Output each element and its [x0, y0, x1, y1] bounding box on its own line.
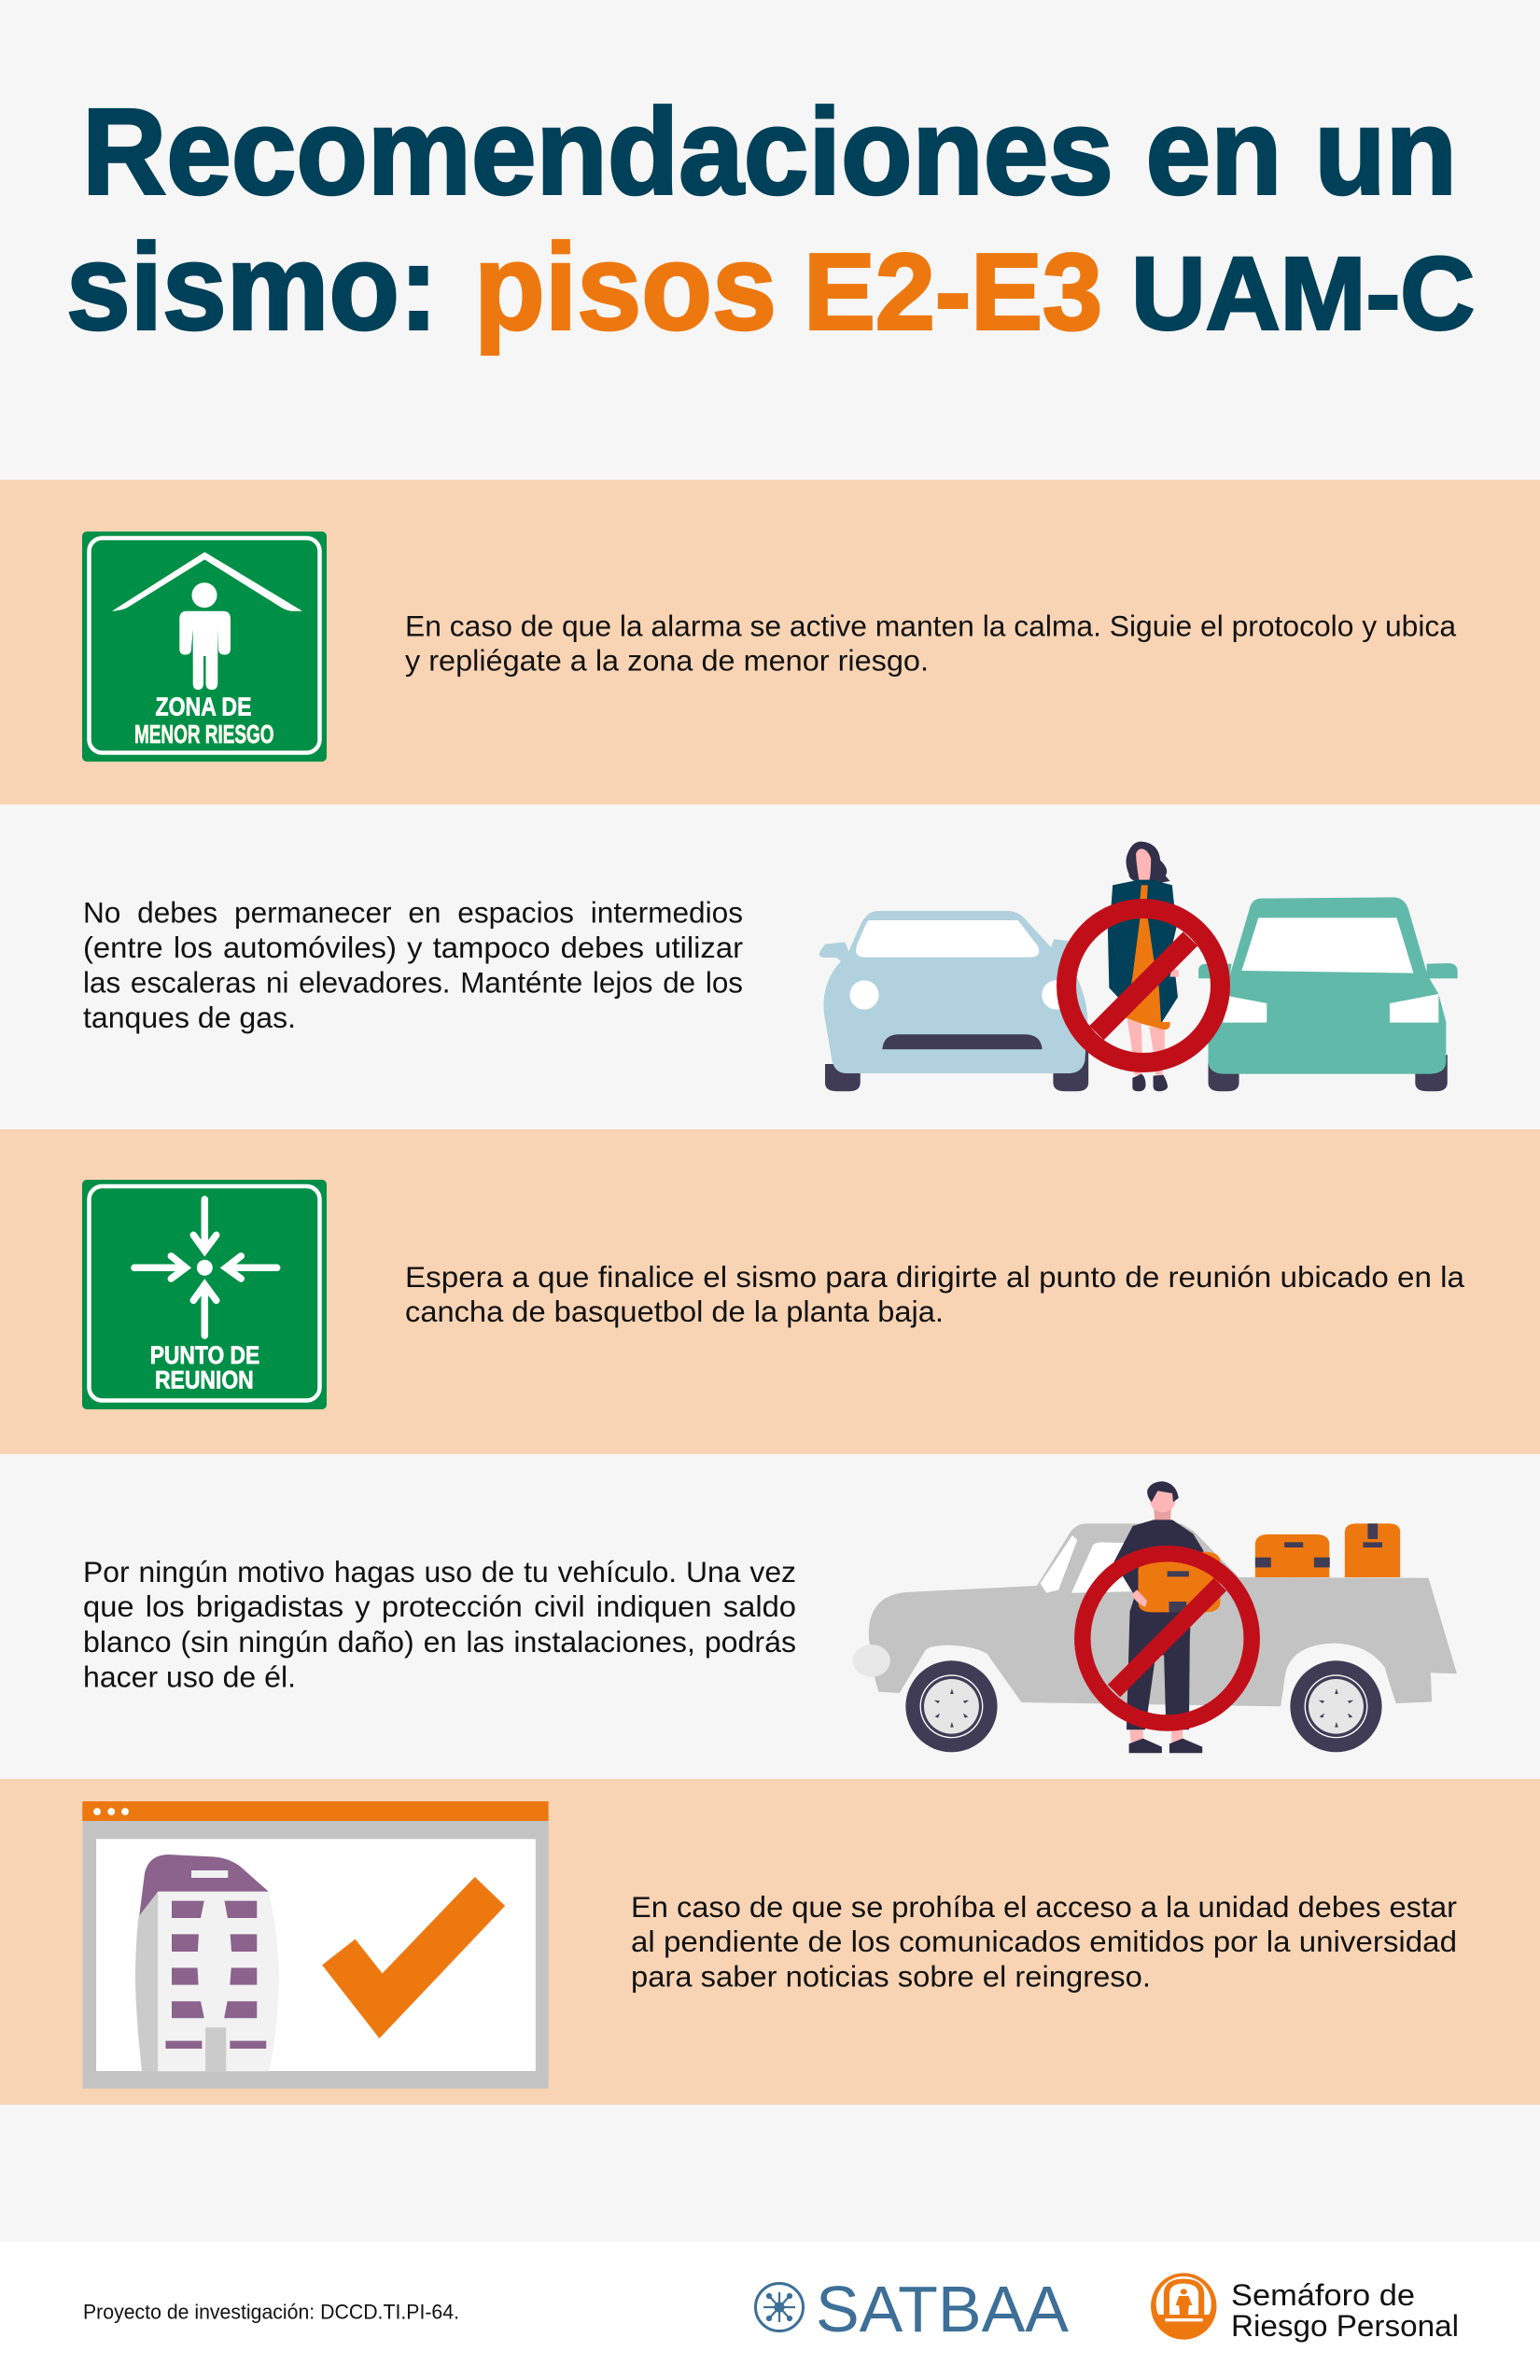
icon: punto de reunion sign: [82, 1180, 327, 1409]
text block: alarma: [405, 609, 1456, 678]
icon: orange check mark: [322, 1877, 505, 2038]
icon: prohibition ring: [1083, 1554, 1252, 1723]
icon: zona de menor riesgo sign: ZONA DE: [155, 693, 252, 721]
title: sismo:: [66, 218, 438, 355]
illustration: browser window with building and check: [82, 1801, 549, 2089]
icon: zona de menor riesgo sign: [82, 532, 327, 762]
text block: vehiculo: Por ningún motivo hagas uso de tu vehículo. Una vez: [83, 1555, 796, 1589]
panel: zona de menor riesgo: [0, 480, 1540, 805]
text block: comunicados: para saber noticias sobre el reingreso.: [631, 1960, 1151, 1994]
text block: alarma: En caso de que la alarma se active manten la calma. Siguie el protocolo y ubica: [405, 609, 1456, 643]
title: [66, 82, 1475, 355]
logo: Semaforo de Riesgo Personal: Semáforo de: [1231, 2278, 1415, 2312]
text block: comunicados: al pendiente de los comunicados emitidos por la universidad: [631, 1925, 1457, 1958]
text block: comunicados: En caso de que se prohíba el acceso a la unidad debes estar: [631, 1890, 1457, 1924]
illustration: man and pickup truck: [853, 1481, 1457, 1753]
text block: comunicados: [631, 1890, 1457, 1994]
text: project code: Proyecto de investigación: DCCD.TI.PI-64.: [83, 2300, 459, 2324]
title: UAM-C: [1131, 237, 1475, 351]
text block: alarma: y repliégate a la zona de menor riesgo.: [405, 644, 929, 678]
title: E2-E3: [804, 231, 1102, 353]
panel: comunicados: [0, 1779, 1540, 2105]
panel: no usar vehiculo: [83, 1481, 1457, 1753]
icon: punto de reunion sign: PUNTO DE: [150, 1341, 259, 1369]
text block: espacios intermedios: No debes permanecer en espacios intermedios: [83, 895, 743, 929]
icon: prohibition ring: [1066, 909, 1221, 1062]
panel: espacios intermedios: [83, 842, 1458, 1091]
logo: SATBAA: SATBAA: [816, 2273, 1069, 2345]
title: pisos: [474, 218, 777, 355]
title: Recomendaciones en un: [82, 82, 1457, 220]
text block: vehiculo: [83, 1555, 796, 1693]
text block: vehiculo: blanco (sin ningún daño) en las instalaciones, podrás: [83, 1625, 796, 1659]
text block: espacios intermedios: (entre los automóviles) y tampoco debes utilizar: [83, 931, 743, 964]
logo: Semaforo de Riesgo Personal: Riesgo Personal: [1231, 2309, 1459, 2343]
icon: prohibition bar: [1089, 931, 1197, 1040]
text block: espacios intermedios: las escaleras ni elevadores. Manténte lejos de los: [83, 965, 743, 999]
logo: Semaforo de Riesgo Personal: [1151, 2273, 1459, 2343]
icon: zona de menor riesgo sign: MENOR RIESGO: [134, 720, 274, 749]
text block: espacios intermedios: tanques de gas.: [83, 1001, 296, 1034]
text block: vehiculo: hacer uso de él.: [83, 1659, 296, 1693]
text block: punto de reunion: Espera a que finalice el sismo para dirigirte al punto de reunión ubicado en la: [405, 1260, 1465, 1294]
text block: vehiculo: que los brigadistas y protección civil indiquen saldo: [83, 1589, 796, 1623]
footer: [0, 2242, 1540, 2380]
icon: prohibition bar: [1108, 1578, 1226, 1697]
text block: punto de reunion: [405, 1260, 1465, 1328]
illustration: woman between cars: [819, 842, 1458, 1091]
text block: punto de reunion: cancha de basquetbol de la planta baja.: [405, 1295, 944, 1328]
icon: punto de reunion sign: REUNION: [155, 1366, 254, 1394]
panel: punto de reunion: [0, 1129, 1540, 1454]
text block: espacios intermedios: [83, 895, 743, 1034]
